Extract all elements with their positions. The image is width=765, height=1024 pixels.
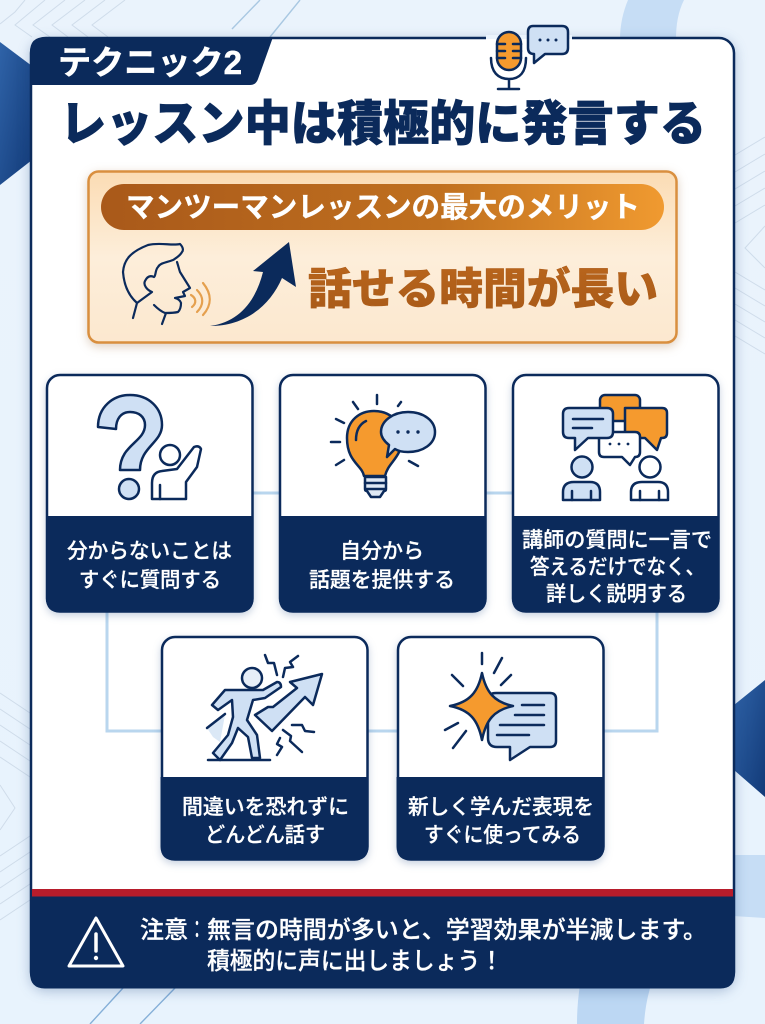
caption [309, 540, 455, 592]
card: do not fear mistakes [160, 637, 368, 860]
caption: 詳しく説明する [546, 583, 687, 606]
caption: 間違いを恐れずに [182, 796, 349, 819]
caption [522, 529, 712, 606]
card: ask questions [46, 375, 254, 612]
icon: speaking head [123, 244, 210, 324]
icon: person walking through obstacles with arrow [207, 655, 322, 760]
warning text: 積極的に声に出しましょう！ [207, 948, 503, 975]
caption: 新しく学んだ表現を [408, 796, 594, 819]
caption: すぐに使ってみる [424, 824, 581, 847]
footer warning bar [30, 889, 735, 988]
caption: 分からないことは [67, 540, 232, 563]
card: use new expressions [396, 637, 604, 860]
icon: question mark and person raising hand [98, 395, 201, 499]
warning text: 無言の時間が多いと、学習効果が半減します。 [207, 917, 707, 944]
title: レッスン中は積極的に発言する [60, 98, 706, 151]
icon: light bulb with speech bubble [331, 395, 435, 497]
icon: upward arrow [210, 242, 296, 326]
warning text: 注意 [140, 917, 188, 944]
caption [408, 796, 594, 847]
merit statement: 話せる時間が長い [308, 265, 658, 314]
caption [67, 540, 232, 592]
warning text: ： [190, 917, 204, 944]
icon: sparkle and text bubble [445, 653, 556, 760]
connector lines [107, 493, 657, 731]
caption: 講師の質問に一言で [522, 529, 712, 552]
icon: warning triangle [69, 918, 123, 966]
merit heading pill: マンツーマンレッスンの最大のメリット [126, 191, 640, 224]
card: explain in detail [512, 375, 720, 612]
caption: すぐに質問する [79, 569, 221, 592]
caption [182, 796, 349, 847]
tab: technique label [30, 37, 273, 85]
caption: 自分から [340, 540, 424, 563]
card: offer topics [279, 375, 486, 612]
caption: どんどん話す [205, 824, 325, 847]
caption: 答えるだけでなく、 [530, 555, 705, 579]
warning text [140, 917, 707, 975]
merit heading pill [101, 184, 664, 230]
panel: biggest merit [88, 172, 676, 342]
icon: microphone and speech bubble [486, 26, 572, 89]
tab: technique label: テクニック2 [58, 44, 242, 81]
icon: conversation bubbles and two people [563, 395, 668, 500]
caption: 話題を提供する [309, 569, 455, 592]
